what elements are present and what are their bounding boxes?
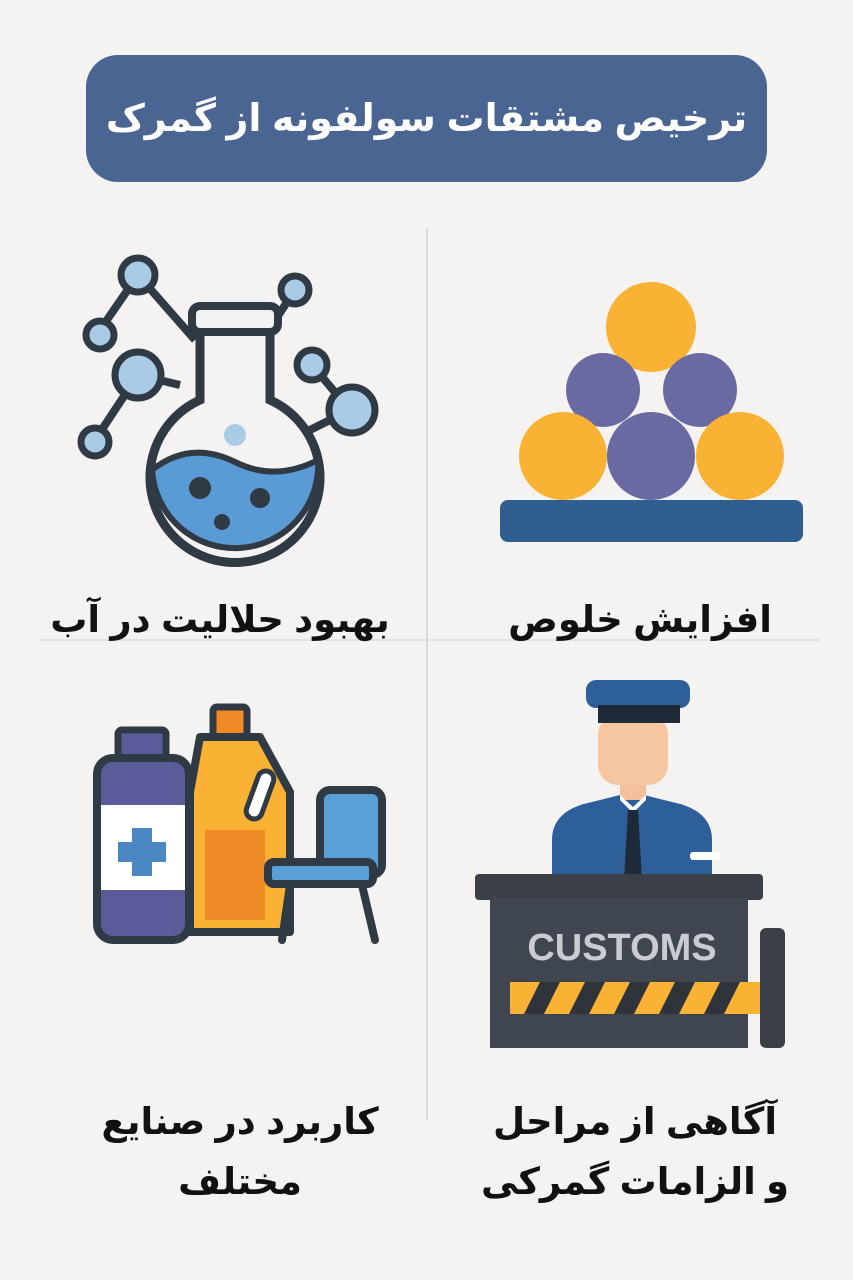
label: water solubility: بهبود حلالیت در آب: [50, 599, 390, 640]
label: customs procedures: و الزامات گمرکی: [481, 1161, 789, 1202]
icon: bottles and chair: [93, 704, 386, 944]
icon: customs officer: [475, 680, 785, 1048]
label: industrial applications: کاربرد در صنایع: [101, 1101, 379, 1142]
label: industrial applications: [101, 1101, 379, 1202]
title: ترخیص مشتقات سولفونه از گمرک: [106, 98, 747, 140]
label: purity: افزایش خلوص: [508, 599, 772, 640]
icon: stacked spheres: [500, 282, 803, 542]
label: industrial applications: مختلف: [178, 1161, 302, 1202]
title: [86, 55, 767, 182]
icon: flask with molecules: [78, 254, 378, 567]
icon: customs officer: CUSTOMS: [527, 927, 717, 969]
label: customs procedures: [481, 1098, 789, 1203]
label: customs procedures: آگاهی از مراحل: [493, 1101, 777, 1142]
